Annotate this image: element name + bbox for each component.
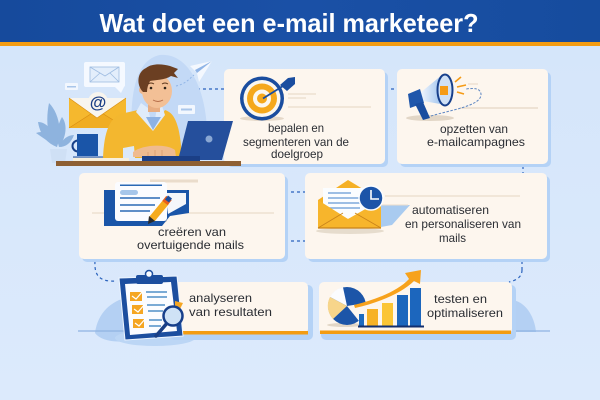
background blob bbox=[131, 55, 207, 150]
icon: mail envelope with at sign bbox=[69, 92, 126, 128]
panel: overtuigende mails bbox=[79, 173, 288, 262]
label: opzetten van bbox=[440, 122, 508, 136]
icon: paper plane bbox=[176, 61, 212, 86]
icon: laptop bbox=[142, 121, 233, 161]
label: en personaliseren van bbox=[405, 217, 521, 231]
label bbox=[243, 121, 349, 161]
panel: automatiseren bbox=[305, 173, 550, 262]
panel: doelgroep bbox=[224, 69, 388, 167]
illustration: marketer at desk bbox=[36, 55, 241, 166]
title: Wat doet een e-mail marketeer? bbox=[100, 8, 478, 38]
label: segmenteren van de bbox=[243, 135, 349, 149]
label bbox=[405, 203, 521, 245]
label: van resultaten bbox=[189, 305, 272, 319]
label: testen en bbox=[434, 292, 487, 306]
header banner bbox=[0, 0, 600, 46]
growth arrow bbox=[354, 270, 421, 308]
icon: clipboard bbox=[119, 270, 183, 340]
label: automatiseren bbox=[412, 203, 489, 217]
desk bbox=[56, 161, 241, 166]
panel: optimaliseren bbox=[319, 270, 550, 340]
label bbox=[189, 291, 272, 319]
label: optimaliseren bbox=[427, 306, 503, 320]
label: overtuigende mails bbox=[137, 238, 244, 252]
bar chart bbox=[358, 288, 424, 328]
label: e-mailcampagnes bbox=[427, 135, 525, 149]
dashed connectors bbox=[95, 89, 523, 282]
label: mails bbox=[439, 231, 466, 245]
label: doelgroep bbox=[271, 147, 323, 161]
panel: campagnes bbox=[397, 69, 551, 167]
icon: pie chart bbox=[327, 287, 366, 327]
character: shirt and sweater bbox=[103, 103, 182, 158]
panel: analyseren bbox=[78, 270, 313, 346]
label bbox=[427, 122, 525, 149]
icon: letter and pencil bbox=[92, 181, 274, 226]
icon: target bbox=[240, 76, 371, 121]
label bbox=[137, 225, 244, 252]
icon: envelope speech bubble bbox=[84, 62, 125, 93]
label: bepalen en bbox=[268, 121, 324, 135]
label: analyseren bbox=[189, 291, 252, 305]
icon: megaphone bbox=[406, 74, 538, 121]
character: head and hair bbox=[138, 64, 178, 112]
icon: envelope with clock bbox=[316, 180, 520, 234]
icon: coffee mug bbox=[72, 134, 129, 161]
icon: plant bbox=[36, 103, 74, 163]
icon: mail envelope with at sign: @ bbox=[90, 93, 106, 112]
label bbox=[427, 292, 503, 320]
label: creëren van bbox=[158, 225, 226, 239]
